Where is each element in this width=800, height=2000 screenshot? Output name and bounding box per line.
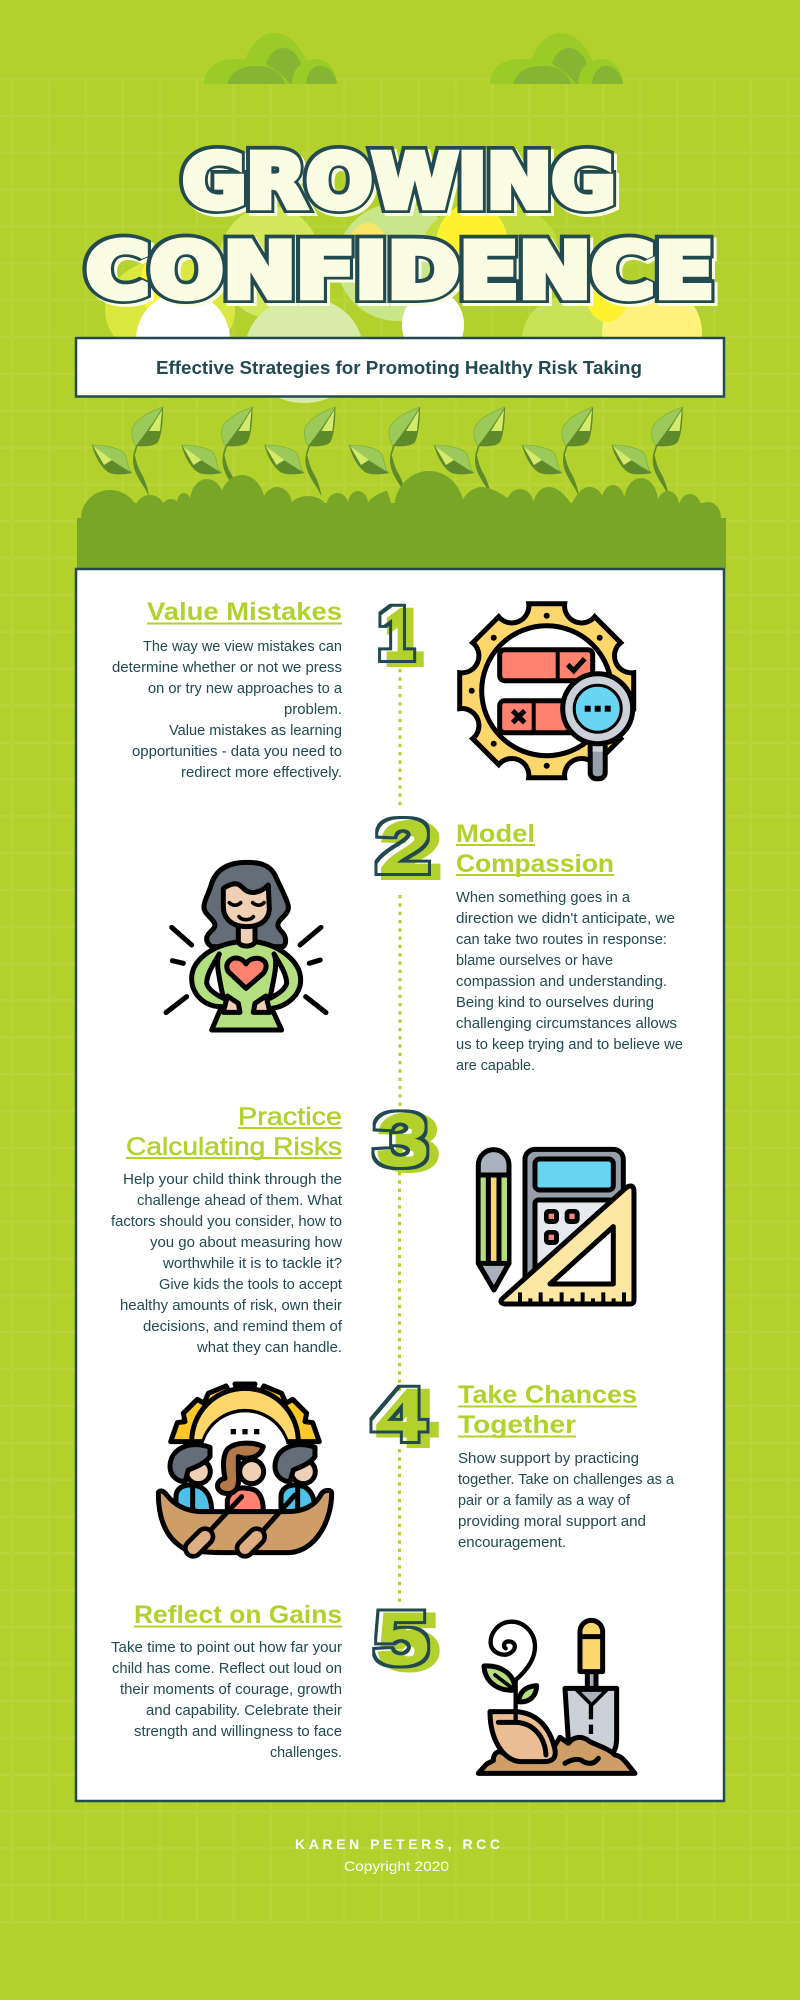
heading: Practice Calculating Risks: Calculating Risks (126, 1133, 342, 1161)
step 4 (158, 1373, 675, 1553)
heading: Reflect on Gains: Reflect on Gains (134, 1601, 342, 1629)
background blobs (105, 203, 702, 403)
text: reflect on gains: their moments of courage, growth (120, 1682, 342, 1698)
heading: Take Chances Together: Together (458, 1411, 576, 1439)
title line: GROWING: GROWING (182, 138, 615, 224)
icon: seedling and trowel (478, 1620, 635, 1773)
step 2 (166, 805, 683, 1074)
title line: GROWING: GROWING (185, 142, 618, 228)
text: model compassion: direction we didn't anticipate, we (456, 911, 675, 927)
text: practice calculating risks: what they can handle. (196, 1340, 342, 1356)
text: take chances together: providing moral support and (458, 1514, 646, 1530)
text: practice calculating risks: decisions, and remind them of (143, 1319, 343, 1335)
number 5 (373, 1597, 437, 1684)
heading: Take Chances Together (458, 1381, 637, 1439)
text: take chances together: pair or a family as a way of (458, 1493, 631, 1509)
text: practice calculating risks: challenge ahead of them. What (137, 1193, 342, 1209)
copyright: Copyright 2020 (344, 1858, 449, 1874)
text: reflect on gains: child has come. Reflect out loud on (112, 1661, 342, 1677)
text: practice calculating risks: factors should you consider, how to (111, 1214, 342, 1230)
number 2 (375, 805, 439, 892)
heading: Practice Calculating Risks: Practice (238, 1103, 342, 1131)
text: reflect on gains: Take time to point out how far your (111, 1640, 342, 1656)
subtitle box (76, 338, 724, 396)
title line: CONFIDENCE: CONFIDENCE (88, 228, 716, 318)
title line: GROWING: GROWING (182, 139, 616, 225)
icon: gear with checklist and magnifier (460, 604, 634, 779)
text: value mistakes: redirect more effectively. (181, 765, 342, 781)
text: model compassion: are capable. (456, 1058, 535, 1074)
text: take chances together: encouragement. (458, 1535, 566, 1551)
text: take chances together: together. Take on challenges as a (458, 1472, 675, 1488)
text: model compassion: When something goes in a (456, 890, 631, 906)
text: reflect on gains: challenges. (270, 1745, 342, 1761)
text: reflect on gains: strength and willingness to face (134, 1724, 342, 1740)
icon: pencil, calculator and set square (478, 1149, 634, 1304)
bush left (204, 33, 337, 84)
number 2: 2 (383, 809, 439, 892)
hedge (77, 471, 726, 568)
text: value mistakes (112, 639, 343, 781)
text: take chances together (458, 1451, 675, 1551)
dotted connector line (398, 669, 402, 1603)
step 5 (111, 1597, 635, 1773)
text: value mistakes: determine whether or not we press (112, 660, 342, 676)
text: practice calculating risks: Help your child think through the (123, 1172, 342, 1188)
text: model compassion: Being kind to ourselves during (456, 995, 654, 1011)
number 5: 5 (381, 1601, 437, 1684)
heading: Model Compassion: Model (456, 820, 535, 848)
text: value mistakes: Value mistakes as learning (169, 723, 342, 739)
text: model compassion: compassion and understanding. (456, 974, 667, 990)
icon: family in canoe (158, 1384, 332, 1553)
text: practice calculating risks: healthy amounts of risk, own their (120, 1298, 342, 1314)
heading: Take Chances Together: Take Chances (458, 1381, 637, 1409)
text: value mistakes: The way we view mistakes can (143, 639, 342, 655)
step 3 (111, 1098, 634, 1356)
heading: Model Compassion: Compassion (456, 850, 614, 878)
text: practice calculating risks: you go about measuring how (150, 1235, 343, 1251)
text: reflect on gains (111, 1640, 342, 1761)
text: take chances together: Show support by practicing (458, 1451, 639, 1467)
sprouts row (92, 407, 683, 496)
step 1 (112, 592, 634, 781)
author name: KAREN PETERS, RCC (295, 1836, 500, 1852)
number 3: 3 (381, 1101, 437, 1184)
number 1: 1 (378, 592, 414, 675)
heading: Value Mistakes: Value Mistakes (147, 598, 342, 626)
heading: Model Compassion (456, 820, 614, 878)
number 3 (373, 1098, 437, 1184)
number 4 (372, 1373, 434, 1460)
text: value mistakes: opportunities - data you need to (132, 744, 342, 760)
subtitle box: Effective Strategies for Promoting Healthy Risk Taking (156, 358, 642, 378)
text: practice calculating risks: Give kids the tools to accept (159, 1277, 342, 1293)
icon: woman with heart (166, 862, 326, 1030)
text: model compassion: can take two routes in response: (456, 932, 667, 948)
number 5: 5 (373, 1597, 429, 1680)
text: practice calculating risks (111, 1172, 343, 1356)
text: model compassion: blame ourselves or have (456, 953, 613, 969)
text: model compassion: us to keep trying and to believe we (456, 1037, 683, 1053)
title line: CONFIDENCE: CONFIDENCE (86, 226, 714, 314)
number 1: 1 (386, 596, 422, 679)
title line: CONFIDENCE: CONFIDENCE (86, 226, 714, 315)
heading: Practice Calculating Risks (126, 1103, 342, 1161)
footer (295, 1836, 500, 1874)
number 3: 3 (373, 1098, 429, 1181)
bush right (490, 33, 623, 84)
title (86, 138, 716, 318)
panel: strategies (76, 569, 724, 1801)
number 2: 2 (375, 805, 431, 888)
text: value mistakes: problem. (284, 702, 342, 718)
text: reflect on gains: and capability. Celebrate their (146, 1703, 342, 1719)
number 4: 4 (372, 1373, 426, 1456)
text: model compassion: challenging circumstances allows (456, 1016, 677, 1032)
number 4: 4 (380, 1377, 434, 1460)
text: value mistakes: on or try new approaches to a (148, 681, 343, 697)
text: practice calculating risks: worthwhile it is to tackle it? (162, 1256, 342, 1272)
text: model compassion (456, 890, 683, 1074)
